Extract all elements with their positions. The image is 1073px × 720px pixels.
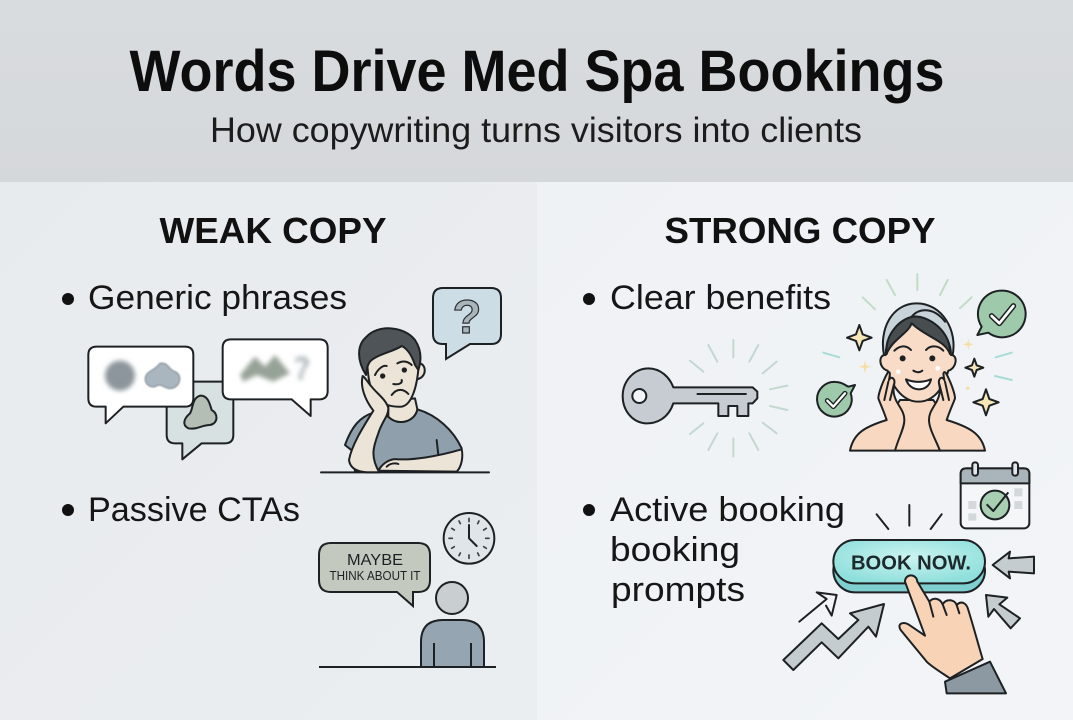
bullet: generic phrases: Generic phrases bbox=[88, 279, 347, 317]
ear bbox=[417, 363, 425, 379]
sparkles bbox=[847, 325, 999, 415]
facial features bbox=[375, 362, 412, 395]
icon: question bubble: ? bbox=[453, 290, 481, 343]
icon: calendar with check bbox=[961, 462, 1029, 528]
face bbox=[367, 343, 419, 407]
icon: clock bbox=[444, 513, 494, 564]
icon: glow rays and badges bbox=[817, 274, 1026, 417]
bullet: active booking prompts: Active booking bbox=[610, 491, 845, 529]
arrows pointing at button bbox=[783, 552, 1034, 670]
shirt bbox=[345, 409, 462, 472]
rays bbox=[690, 340, 787, 457]
left bubble bbox=[88, 347, 193, 423]
icon: confused person bbox=[321, 328, 489, 472]
header banner bbox=[0, 0, 1073, 182]
subtitle: How copywriting turns visitors into clients bbox=[210, 111, 862, 150]
icon: question bubble bbox=[433, 288, 501, 359]
icon: book now button with rays bbox=[833, 505, 985, 592]
icon: key with rays bbox=[623, 340, 787, 457]
callout: maybe think about it: MAYBE bbox=[347, 552, 403, 569]
neck bbox=[388, 398, 417, 422]
bullet: active booking prompts: booking bbox=[610, 531, 740, 569]
table line bbox=[321, 469, 489, 475]
button label: BOOK NOW. bbox=[851, 552, 971, 574]
glow rays bbox=[823, 274, 1012, 380]
bullet: passive CTAs: Passive CTAs bbox=[88, 491, 300, 529]
bullet: active booking prompts: prompts bbox=[611, 571, 745, 609]
forearm on table bbox=[378, 449, 462, 472]
check bubble right bbox=[977, 291, 1026, 337]
bullet: clear benefits: Clear benefits bbox=[610, 279, 831, 317]
panel: weak copy bbox=[0, 182, 537, 720]
sleeve bbox=[945, 662, 1006, 693]
features bbox=[894, 346, 943, 389]
headband bbox=[883, 303, 954, 357]
right hand bbox=[929, 372, 955, 451]
back bubble bbox=[167, 382, 233, 459]
key body bbox=[623, 368, 757, 423]
title: Words Drive Med Spa Bookings bbox=[130, 39, 944, 104]
arm and hand on cheek bbox=[349, 376, 388, 472]
icon: happy woman bbox=[850, 303, 985, 451]
check bubble left bbox=[817, 382, 855, 417]
hair bbox=[359, 328, 421, 375]
hair bbox=[886, 317, 950, 354]
callout: maybe think about it: THINK ABOUT IT bbox=[330, 569, 421, 583]
icon: blurred speech bubbles bbox=[88, 339, 328, 459]
right bubble bbox=[223, 339, 328, 416]
heading: weak copy: WEAK COPY bbox=[160, 210, 386, 251]
left hand bbox=[878, 372, 904, 451]
icon: pointing hand bbox=[899, 575, 1006, 693]
icon: idle person silhouette bbox=[319, 582, 496, 667]
heading: strong copy: STRONG COPY bbox=[664, 210, 936, 251]
callout: maybe think about it bbox=[319, 543, 430, 606]
face and ears bbox=[880, 323, 956, 402]
panel: strong copy bbox=[537, 182, 1073, 720]
shoulders and neck bbox=[850, 400, 985, 451]
bullet: active booking prompts bbox=[583, 491, 845, 609]
